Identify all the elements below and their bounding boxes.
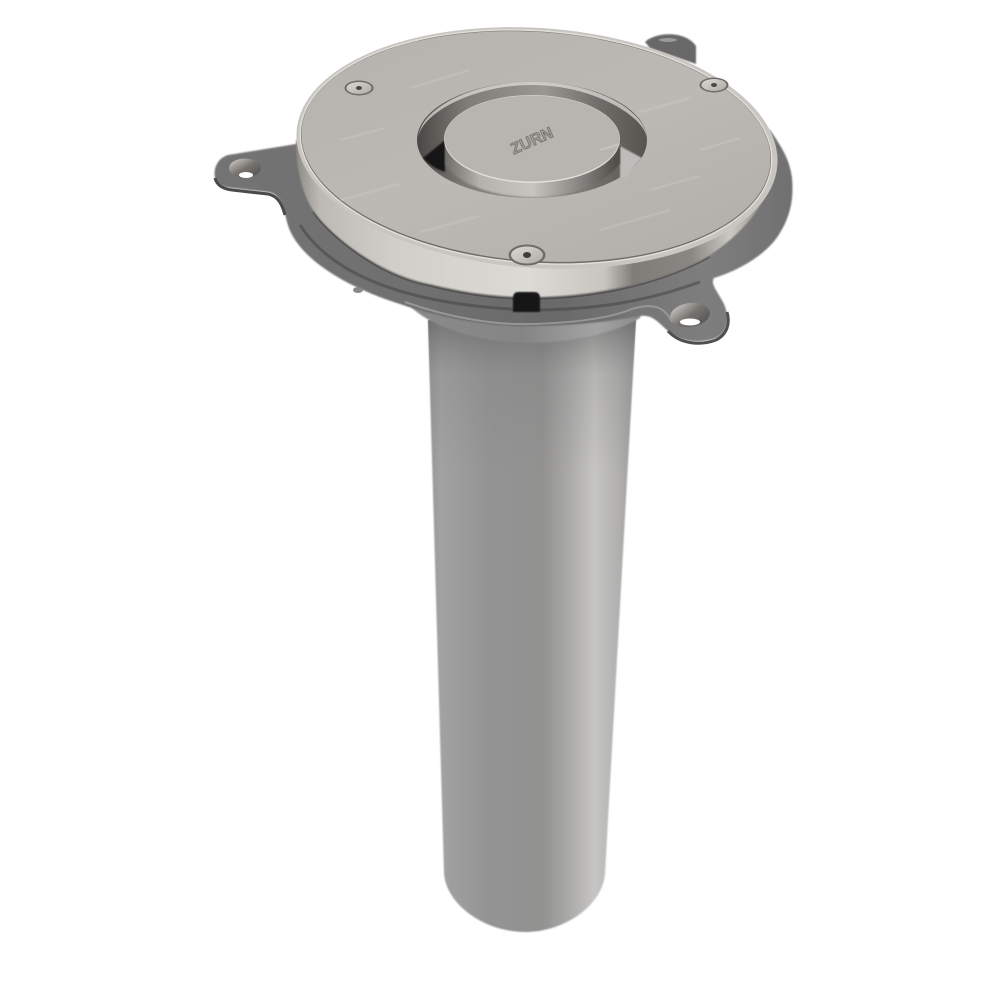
screw: top left	[344, 80, 374, 96]
center cap	[444, 95, 620, 197]
brushed texture	[340, 70, 740, 232]
plate rim side	[296, 140, 778, 299]
right lug mounting hole	[669, 300, 711, 330]
left lug mounting hole	[229, 158, 261, 178]
drain slot	[513, 292, 540, 312]
top plate	[288, 11, 786, 285]
pipe body	[428, 320, 636, 932]
small stud under flange	[353, 287, 363, 293]
screw: bottom	[508, 244, 546, 266]
top rear lug	[645, 34, 696, 64]
flange step line	[405, 302, 672, 324]
collar under flange	[402, 290, 645, 343]
screw: top right	[700, 78, 728, 92]
mounting flange with lugs	[215, 100, 792, 343]
engraved logo: ZURN	[508, 125, 556, 158]
center recess	[417, 82, 647, 198]
